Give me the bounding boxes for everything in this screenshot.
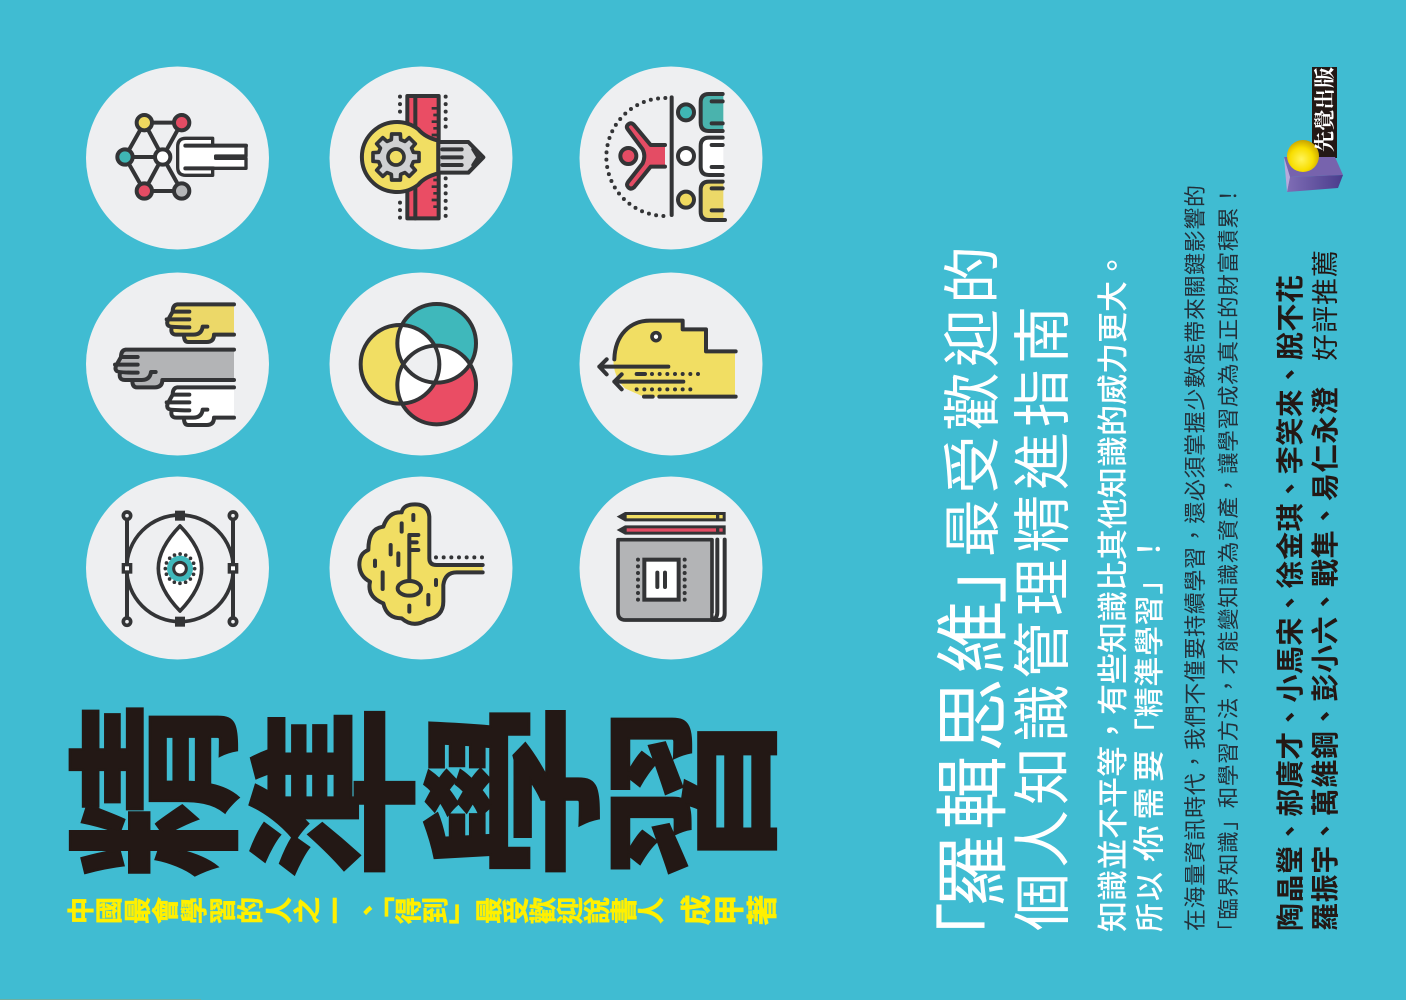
main title: 學 xyxy=(414,703,622,879)
publisher logo xyxy=(1284,67,1343,192)
icon circle: three fists xyxy=(86,272,269,456)
endorsers: 羅振宇、萬維鋼、彭小六、戰隼、易仁永澄 xyxy=(1310,387,1341,931)
tagline: 你需要 xyxy=(1131,750,1167,857)
author subtitle: 、「得到」 xyxy=(354,898,476,928)
description xyxy=(1183,185,1241,942)
icon circle: bulb gear ruler pencil xyxy=(330,66,512,250)
headline: 羅輯思維 xyxy=(932,596,1015,908)
tagline: ， xyxy=(1134,843,1167,873)
endorsers: 陶晶瑩、郝廣才、小馬宋、徐金琪、李笑來、脫不花 xyxy=(1275,275,1306,931)
headline: 最受歡迎的 xyxy=(941,246,1006,557)
main title: 精 xyxy=(61,703,259,879)
icon circle: eye with bezier handles xyxy=(86,476,269,660)
headline: 」 xyxy=(932,530,1015,604)
author subtitle xyxy=(67,895,779,930)
tagline: 「精準學習」！ xyxy=(1134,534,1167,748)
description: 在海量資訊時代，我們不僅要持續學習，還必須掌握少數能帶來關鍵影響的 xyxy=(1183,185,1208,931)
bottom edge strip xyxy=(0,999,201,1000)
headline: 「 xyxy=(932,902,1015,976)
icon circle: bird head with arrows xyxy=(580,272,762,456)
publisher logo: 先覺出版 xyxy=(1309,67,1339,152)
author subtitle: 中國最會學習的人之一 xyxy=(67,898,350,928)
icon circle: book and pencils xyxy=(580,476,762,660)
icon circle: person and three hands xyxy=(580,66,762,250)
main title xyxy=(61,703,798,879)
headline xyxy=(932,246,1076,976)
tagline xyxy=(1096,250,1167,932)
author subtitle: 最受歡迎說書人 xyxy=(475,898,664,928)
icon circle: network and hand xyxy=(86,66,269,250)
icon circle: brain with key xyxy=(330,476,512,660)
author subtitle: 成甲著 xyxy=(680,895,779,930)
description: 「臨界知識」和學習方法，才能變知識為資產，讓學習成為真正的財富積累！ xyxy=(1217,185,1241,942)
endorsers xyxy=(1275,250,1341,931)
tagline: 知識並不平等，有些知識比其他知識的威力更大。 xyxy=(1096,250,1131,932)
endorsers: 好評推薦 xyxy=(1311,250,1341,361)
main title: 習 xyxy=(593,705,798,879)
icon circle: venn diagram xyxy=(330,272,512,456)
main title: 準 xyxy=(240,705,436,879)
tagline: 所以 xyxy=(1134,872,1167,932)
headline: 個人知識管理精進指南 xyxy=(1011,306,1076,931)
